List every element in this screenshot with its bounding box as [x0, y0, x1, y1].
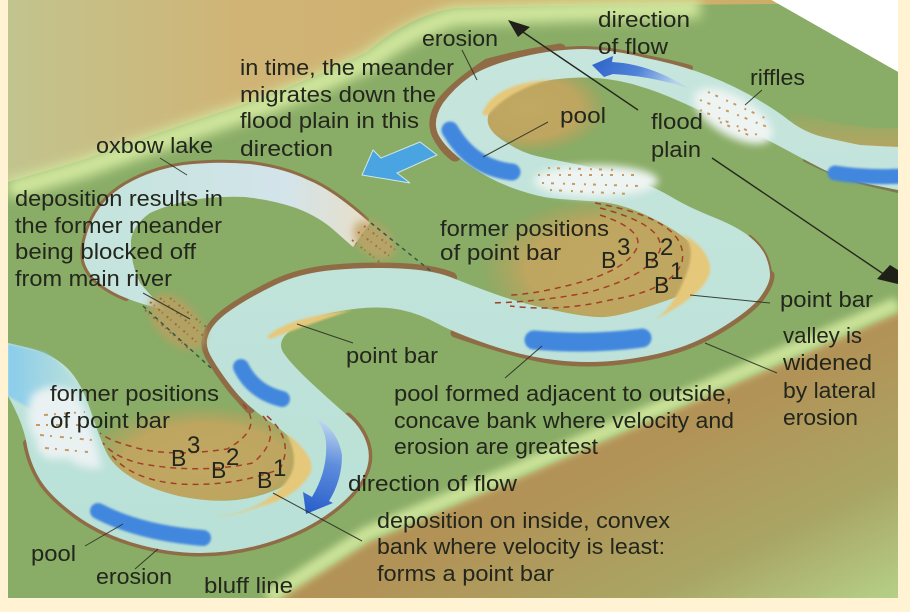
label: meander migration: direction — [240, 136, 333, 161]
label: lower former positions — [50, 381, 219, 433]
flood plain arrow: upstream — [508, 20, 638, 110]
label: point bar deposition: forms a point bar — [377, 561, 554, 586]
label: valley widening — [783, 327, 874, 425]
label: upper erosion: erosion — [422, 26, 498, 51]
former point bar dashed lines: lower — [100, 404, 285, 484]
label: pool explanation: erosion are greatest — [394, 434, 598, 459]
label: flood plain: flood — [651, 109, 703, 134]
leader lines — [85, 50, 777, 569]
label: lower B markers — [171, 432, 286, 493]
lower valley tan slope — [277, 312, 898, 598]
label: lower B markers: 3 — [187, 432, 200, 459]
river banks — [26, 49, 898, 553]
label: upper B markers: 1 — [670, 258, 683, 285]
label: lower B markers: B — [211, 457, 226, 483]
label: lower former positions: of point bar — [50, 408, 170, 433]
label: meander migration — [240, 55, 454, 161]
label: pool explanation: concave bank where velocity and — [394, 408, 734, 433]
label: upper direction of flow — [599, 11, 688, 54]
label: upper former positions: former positions — [440, 216, 609, 241]
flow arrow: upper — [592, 56, 688, 88]
label: oxbow deposition: deposition results in — [15, 186, 223, 211]
label: oxbow deposition: the former meander — [15, 213, 222, 238]
label: upper B markers: B — [644, 247, 659, 273]
label: lower B markers: B — [257, 467, 272, 493]
label: oxbow deposition: from main river — [15, 266, 172, 291]
label: lower pool: pool — [31, 541, 76, 566]
label: upper B markers: B — [654, 272, 669, 298]
oxbow lake — [83, 163, 432, 368]
flow arrow: lower — [303, 418, 342, 514]
sediment plug: upper — [348, 216, 398, 262]
label: valley widening: erosion — [783, 405, 858, 430]
label: bluff line: bluff line — [204, 573, 293, 598]
paper corner — [768, 0, 900, 73]
label: upper B markers: B — [601, 247, 616, 273]
label: upper pool: pool — [560, 103, 606, 128]
label: lower erosion: erosion — [96, 564, 172, 589]
left edge blue water — [8, 342, 72, 408]
label: point bar deposition — [377, 508, 670, 586]
yellow point bars — [213, 79, 710, 517]
label: upper B markers: 3 — [617, 234, 630, 261]
label: upper former positions: of point bar — [440, 240, 561, 265]
label: upper former positions — [440, 216, 609, 265]
label: upper direction of flow: of flow — [598, 34, 668, 59]
label: lower B markers: 2 — [226, 444, 239, 471]
flood plain arrow: downstream — [712, 158, 898, 284]
label: lower B markers: 1 — [273, 455, 286, 482]
label: riffles: riffles — [750, 65, 805, 90]
label: pool explanation: pool formed adjacent to outside, — [394, 381, 732, 406]
label: lower direction of flow: direction of flow — [348, 471, 517, 496]
pools — [98, 130, 905, 538]
migration arrow — [362, 142, 437, 183]
upper bluff highlight — [8, 8, 700, 190]
label: oxbow lake: oxbow lake — [96, 133, 213, 158]
label: meander migration: migrates down the — [240, 82, 436, 107]
upper valley tan slope — [8, 0, 780, 182]
label: upper B markers — [602, 238, 682, 293]
label: point bar deposition: deposition on inside, convex — [377, 508, 670, 533]
label: upper B markers: 2 — [660, 234, 673, 261]
label: lower former positions: former positions — [50, 381, 219, 406]
label: point bar deposition: bank where velocity is least: — [377, 534, 665, 559]
label: middle point bar: point bar — [346, 343, 438, 368]
label: meander migration: flood plain in this — [240, 108, 419, 133]
old channel dashed links — [143, 223, 432, 368]
label: lower B markers: B — [171, 445, 186, 471]
sediment plug: lower — [144, 292, 210, 353]
label: meander migration: in time, the meander — [240, 55, 454, 80]
lower bluff highlight — [268, 304, 898, 598]
former point bar dashed lines: upper — [490, 203, 683, 308]
label: pool explanation — [394, 381, 734, 459]
tan inner areas of the bends — [80, 62, 898, 520]
label: flood plain — [651, 113, 702, 162]
label: valley widening: valley is — [783, 323, 862, 348]
label: right point bar: point bar — [780, 287, 873, 312]
riffles: white patches with gravel — [28, 77, 781, 468]
label: upper direction of flow: direction — [598, 7, 690, 32]
label: oxbow deposition: being blocked off — [15, 239, 197, 264]
label: oxbow deposition — [15, 186, 223, 291]
label: flood plain: plain — [651, 137, 701, 162]
label: valley widening: by lateral — [783, 378, 876, 403]
label: valley widening: widened — [782, 350, 872, 375]
